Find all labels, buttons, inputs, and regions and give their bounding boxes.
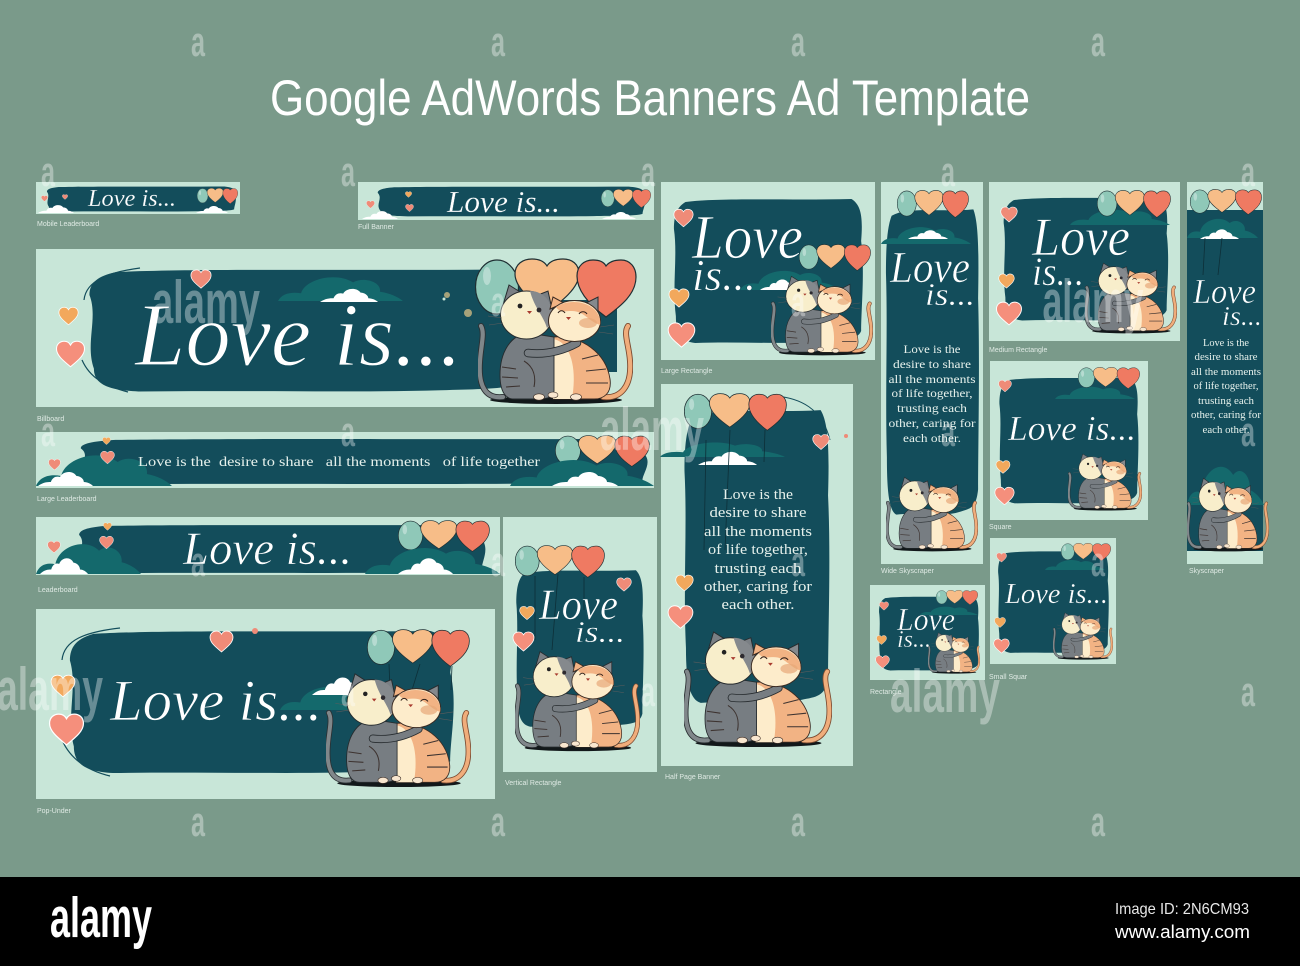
watermarks: a <box>1091 18 1105 65</box>
watermarks: a <box>491 538 505 585</box>
watermarks: a <box>41 408 55 455</box>
watermarks: a <box>341 408 355 455</box>
panel: large rectangle: Love <box>691 204 803 272</box>
label: half page banner: Half Page Banner <box>665 774 721 781</box>
watermarks: a <box>791 538 805 585</box>
panel: square <box>990 361 1148 520</box>
watermarks: a <box>191 18 205 65</box>
watermarks: a <box>791 18 805 65</box>
panel: mobile leaderboard <box>36 182 240 214</box>
panel: skyscraper: desire to share <box>1194 352 1258 363</box>
label: full banner: Full Banner <box>358 224 394 231</box>
watermarks: a <box>1241 668 1255 715</box>
watermarks: a <box>1241 148 1255 195</box>
watermarks: alamy <box>0 656 103 723</box>
panel: half page banner <box>660 384 853 766</box>
footer bar: alamy <box>50 886 152 950</box>
panel: wide skyscraper: each other. <box>903 433 961 445</box>
panel: rectangle: Love <box>896 601 955 637</box>
label: large leaderboard: Large Leaderboard <box>37 496 97 503</box>
watermarks: a <box>191 798 205 845</box>
panel: medium rectangle: is... <box>1032 249 1084 294</box>
panel: medium rectangle <box>989 182 1180 341</box>
footer bar: www.alamy.com <box>1114 922 1250 942</box>
watermarks: alamy <box>890 658 1000 725</box>
panel: leaderboard: Love is... <box>182 523 352 575</box>
panel: skyscraper: Love <box>1192 272 1256 311</box>
panel: square: Love is... <box>1007 409 1136 448</box>
label: large rectangle: Large Rectangle <box>661 368 712 375</box>
panel: wide skyscraper: of life together, <box>892 388 973 400</box>
watermarks: a <box>941 408 955 455</box>
panel: billboard <box>36 249 654 407</box>
panel: vertical rectangle <box>503 517 657 772</box>
panel: large leaderboard: Love is the desire to share all the moments of life together <box>138 454 541 469</box>
footer bar: Image ID: 2N6CM93 <box>1115 901 1249 918</box>
watermarks: a <box>1241 408 1255 455</box>
panel: half page banner: of life together, <box>708 542 808 558</box>
label: pop-under: Pop-Under <box>37 808 72 815</box>
panel: half page banner: Love is the <box>723 487 793 503</box>
panel: half page banner: all the moments <box>704 524 812 540</box>
panel: skyscraper <box>1187 182 1268 564</box>
panel: half page banner: each other. <box>722 597 794 613</box>
panel: small square <box>990 538 1116 664</box>
panel: large rectangle <box>661 182 875 360</box>
watermarks: a <box>641 668 655 715</box>
label: skyscraper: Skyscraper <box>1189 568 1225 575</box>
watermarks: a <box>491 18 505 65</box>
label: rectangle: Rectangle <box>870 689 902 696</box>
label: leaderboard: Leaderboard <box>38 587 78 594</box>
watermarks: a <box>1091 798 1105 845</box>
panel: skyscraper: is... <box>1222 301 1262 331</box>
watermarks: a <box>341 148 355 195</box>
label: small square: Small Squar <box>989 674 1028 681</box>
footer bar <box>0 877 1300 966</box>
panel: wide skyscraper: trusting each <box>897 403 967 415</box>
watermarks: a <box>191 538 205 585</box>
watermarks: a <box>491 798 505 845</box>
panel: wide skyscraper: Love <box>889 243 970 292</box>
panel: wide skyscraper: is... <box>925 276 975 312</box>
panel: skyscraper: all the moments <box>1191 367 1261 378</box>
watermarks: a <box>791 798 805 845</box>
panel: wide skyscraper: all the moments <box>888 374 976 386</box>
panel: full banner <box>358 182 654 220</box>
panel: vertical rectangle: is... <box>575 614 625 649</box>
label: billboard: Billboard <box>37 416 64 423</box>
panel: vertical rectangle: Love <box>538 582 618 629</box>
panel: large leaderboard <box>36 432 654 488</box>
panel: skyscraper: other, caring for <box>1191 410 1262 421</box>
watermarks: a <box>941 148 955 195</box>
label: wide skyscraper: Wide Skyscraper <box>881 568 935 575</box>
watermarks: a <box>341 668 355 715</box>
panel: wide skyscraper: other, caring for <box>888 418 976 430</box>
panel: pop-under: Love is... <box>109 668 322 733</box>
panel: rectangle <box>870 585 985 680</box>
panel: wide skyscraper: desire to share <box>893 359 971 371</box>
panel: mobile leaderboard: Love is... <box>87 186 176 212</box>
label: vertical rectangle: Vertical Rectangle <box>505 780 562 787</box>
panel: medium rectangle: Love <box>1031 207 1130 267</box>
panel: wide skyscraper: Love is the <box>904 344 960 356</box>
watermarks: a <box>1091 538 1105 585</box>
label: medium rectangle: Medium Rectangle <box>989 347 1047 354</box>
watermarks: alamy <box>600 396 704 463</box>
panel: rectangle: is... <box>897 627 931 653</box>
panel: half page banner: desire to share <box>710 505 806 521</box>
panel: skyscraper: each other. <box>1202 425 1250 436</box>
watermarks: a <box>641 148 655 195</box>
watermarks: a <box>791 278 805 325</box>
watermarks: a <box>491 278 505 325</box>
panel: pop-under <box>36 609 495 799</box>
panel: full banner: Love is... <box>446 184 560 219</box>
label: square: Square <box>989 524 1012 531</box>
panel: wide skyscraper <box>881 182 983 564</box>
panel: skyscraper: of life together, <box>1194 381 1258 392</box>
panel: half page banner: other, caring for <box>704 579 812 595</box>
panel: large rectangle: is... <box>692 251 756 300</box>
title: Google AdWords Banners Ad Template <box>270 70 1030 126</box>
watermarks: alamy <box>1042 268 1144 335</box>
panel: leaderboard <box>36 517 500 575</box>
label: mobile leaderboard: Mobile Leaderboard <box>37 221 99 228</box>
watermarks: alamy <box>152 269 260 336</box>
panel: small square: Love is... <box>1004 579 1108 610</box>
panel: skyscraper: Love is the <box>1203 338 1250 349</box>
panel: half page banner: trusting each <box>714 561 802 577</box>
panel: billboard: Love is... <box>133 286 462 385</box>
watermarks: a <box>41 148 55 195</box>
panel: skyscraper: trusting each <box>1198 396 1254 407</box>
